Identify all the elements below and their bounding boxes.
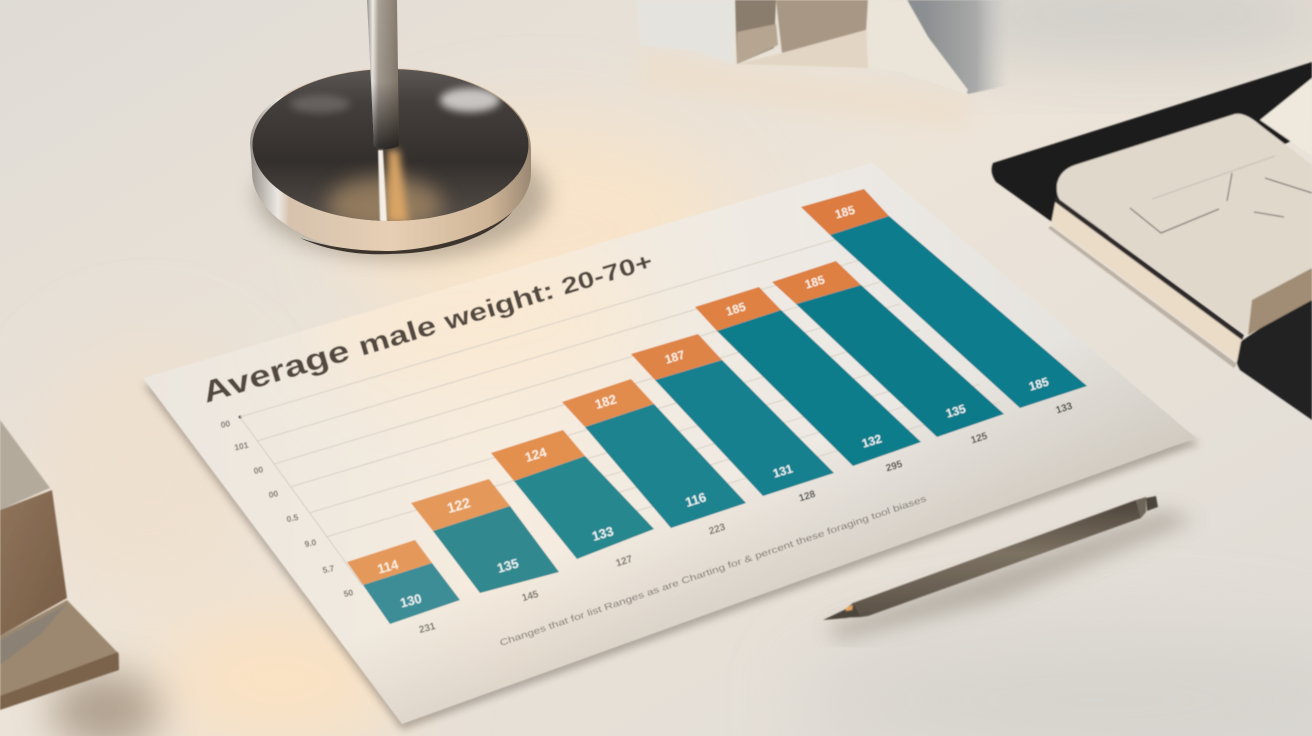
bar 8 [801, 189, 1087, 416]
bar 2: 135 [495, 555, 520, 576]
sheet shadow [143, 384, 1198, 730]
bar 6: 132 [860, 431, 884, 451]
notebook page [1057, 114, 1312, 335]
notebook shadow line [1048, 226, 1237, 368]
lamp bowl [250, 68, 530, 233]
bar 4: 116 [683, 489, 708, 510]
bar 5 [631, 334, 834, 504]
bar 7: 135 [944, 401, 968, 421]
notebook sketch lines [1130, 156, 1312, 233]
pen [823, 496, 1195, 640]
y axis: 5.7 [322, 563, 335, 575]
lamp base shadow [256, 132, 548, 260]
bar 2: 145 [521, 589, 540, 604]
bar 1: 231 [418, 621, 437, 636]
pen body [846, 500, 1141, 617]
bar 5: 131 [771, 461, 795, 481]
notebook facing page [1260, 78, 1312, 156]
bar 5: 128 [798, 489, 817, 504]
notebook cover [992, 62, 1312, 240]
chart title: Average male weight: 20-70+ [198, 243, 656, 410]
bar 3: 133 [590, 523, 615, 544]
background object: folded white stand [636, 0, 1010, 94]
lamp pole [367, 0, 399, 149]
y axis: 9.0 [304, 537, 317, 549]
y axis: 101 [233, 440, 250, 452]
bar 1: 114 [376, 556, 401, 577]
y axis: 00 [253, 464, 264, 476]
bar 6 [695, 287, 921, 474]
notebook [992, 62, 1312, 420]
gridlines [240, 238, 1000, 537]
pen shadow [826, 510, 1195, 640]
bar 8: 185 [833, 203, 857, 222]
bar 8: 133 [1055, 401, 1074, 416]
bar 2 [411, 479, 559, 604]
bar 2: 122 [445, 494, 472, 516]
bar 7: 185 [803, 272, 827, 292]
wooden block and plinth [0, 420, 119, 710]
bar 4: 223 [708, 522, 727, 537]
bar 3: 124 [523, 444, 549, 465]
lamp base rim [250, 68, 531, 254]
bar 7 [772, 261, 1004, 446]
y axis: 00 [268, 488, 279, 500]
footnote: Changes that for list Ranges as are Charting for & percent these foraging tool biases [498, 493, 928, 648]
chart sheet [143, 163, 1196, 724]
bar 7: 125 [970, 431, 989, 446]
bar 1 [347, 540, 460, 636]
y axis: 0.5 [286, 512, 299, 524]
y axis: 00 [220, 418, 231, 430]
bar 8: 185 [1027, 374, 1051, 394]
notebook edge [1051, 198, 1242, 362]
bar 4: 182 [593, 391, 618, 412]
bar 1: 130 [398, 591, 423, 611]
sheet [143, 163, 1196, 724]
bar 6: 295 [885, 459, 904, 474]
y axis: 50 [343, 587, 354, 599]
bar 6: 185 [724, 299, 748, 319]
bar 4 [562, 379, 746, 537]
bar 5: 187 [663, 347, 687, 367]
y axis [220, 416, 362, 599]
bar 3: 127 [615, 554, 634, 569]
table lamp [250, 0, 548, 260]
bar 3 [491, 430, 654, 569]
